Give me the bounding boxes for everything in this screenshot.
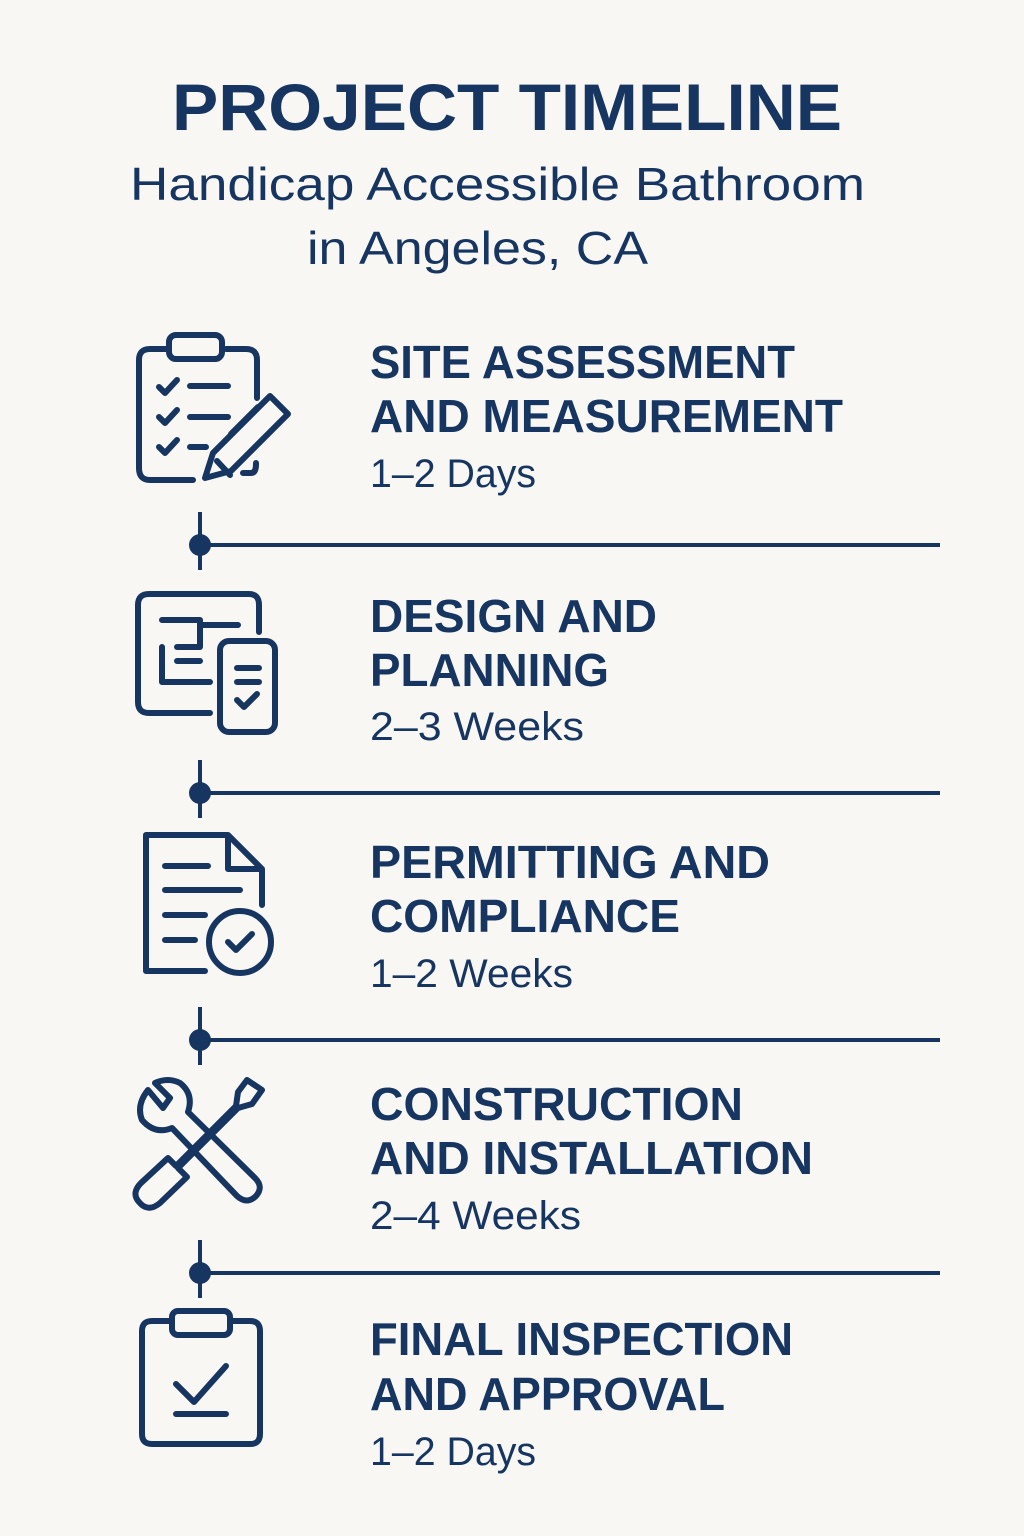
step 2 text: PLANNING <box>370 644 609 696</box>
step 3 text: 1–2 Weeks <box>370 952 573 996</box>
step 3 text: PERMITTING AND <box>370 836 770 888</box>
icon: wrench and screwdriver <box>135 1080 262 1208</box>
subtitle: in Angeles, CA <box>307 222 648 274</box>
divider 3 <box>189 1007 940 1065</box>
step 4 text: AND INSTALLATION <box>370 1132 813 1184</box>
divider 2 <box>189 760 940 818</box>
subtitle: Handicap Accessible Bathroom <box>130 158 865 210</box>
step 4 text: CONSTRUCTION <box>370 1078 743 1130</box>
step 1 text <box>370 336 843 496</box>
step 5 text: FINAL INSPECTION <box>370 1313 793 1365</box>
step 2 text <box>370 590 657 749</box>
icon: design documents <box>138 594 275 732</box>
step 2 text: DESIGN AND <box>370 590 657 642</box>
step 5 text: 1–2 Days <box>370 1430 536 1474</box>
step 2 text: 2–3 Weeks <box>370 705 584 749</box>
subtitle <box>130 158 865 274</box>
icon: document with check <box>146 835 271 973</box>
step 1 text: 1–2 Days <box>370 452 536 496</box>
step 3 text <box>370 836 770 996</box>
step 5 text: AND APPROVAL <box>370 1368 725 1420</box>
step 4 text <box>370 1078 813 1238</box>
icon: clipboard check <box>142 1311 260 1444</box>
divider 1 <box>189 512 940 570</box>
step 3 text: COMPLIANCE <box>370 890 680 942</box>
step 1 text: AND MEASUREMENT <box>370 390 843 442</box>
step 4 text: 2–4 Weeks <box>370 1194 581 1238</box>
icon: clipboard with pencil <box>139 335 288 480</box>
divider 4 <box>189 1240 940 1298</box>
step 1 text: SITE ASSESSMENT <box>370 336 795 388</box>
title: PROJECT TIMELINE <box>172 70 842 144</box>
step 5 text <box>370 1313 793 1474</box>
